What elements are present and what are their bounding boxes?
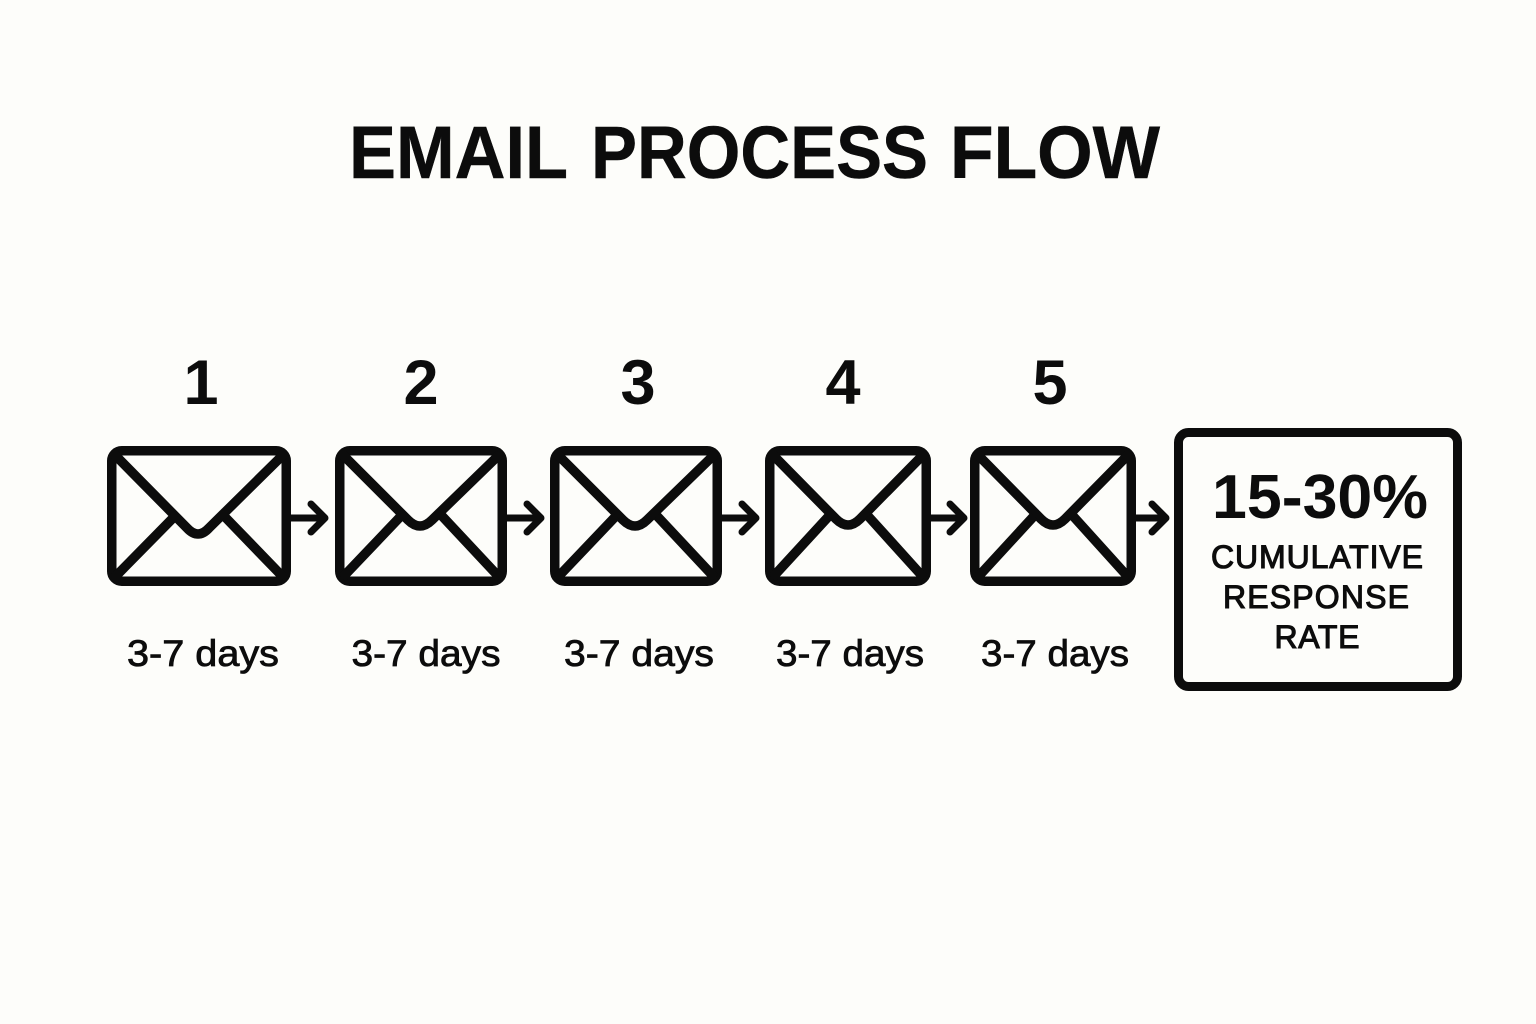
stat caption: RATE [1274, 619, 1360, 655]
step 3 number: 3 [620, 348, 656, 418]
duration label 1: 3-7 days [127, 633, 279, 674]
title: EMAIL [349, 111, 568, 194]
icon: envelope 4 [770, 451, 926, 581]
duration label 5: 3-7 days [981, 633, 1129, 674]
arrow 5 [1135, 504, 1166, 532]
stat caption [1211, 539, 1423, 655]
icon: envelope 3 [555, 451, 717, 581]
step 2 number: 2 [403, 348, 439, 418]
step 1 number: 1 [183, 348, 219, 418]
title: PROCESS [591, 111, 928, 194]
icon: envelope 5 [975, 451, 1131, 581]
step 4 number: 4 [825, 348, 861, 418]
arrow 1 [290, 504, 325, 532]
stat caption: CUMULATIVE [1211, 539, 1423, 575]
icon: envelope 2 [340, 451, 502, 581]
stat value: 15-30% [1212, 463, 1428, 532]
stat caption: RESPONSE [1223, 579, 1409, 615]
title [349, 111, 1160, 194]
icon: envelope 1 [112, 451, 286, 581]
arrow 2 [506, 504, 541, 532]
duration label 3: 3-7 days [564, 633, 714, 674]
duration label 4: 3-7 days [776, 633, 924, 674]
panel: cumulative response rate [1178, 432, 1458, 686]
arrow 3 [721, 504, 756, 532]
step 5 number: 5 [1032, 348, 1068, 418]
title: FLOW [950, 111, 1160, 194]
duration label 2: 3-7 days [352, 633, 500, 674]
arrow 4 [930, 504, 964, 532]
